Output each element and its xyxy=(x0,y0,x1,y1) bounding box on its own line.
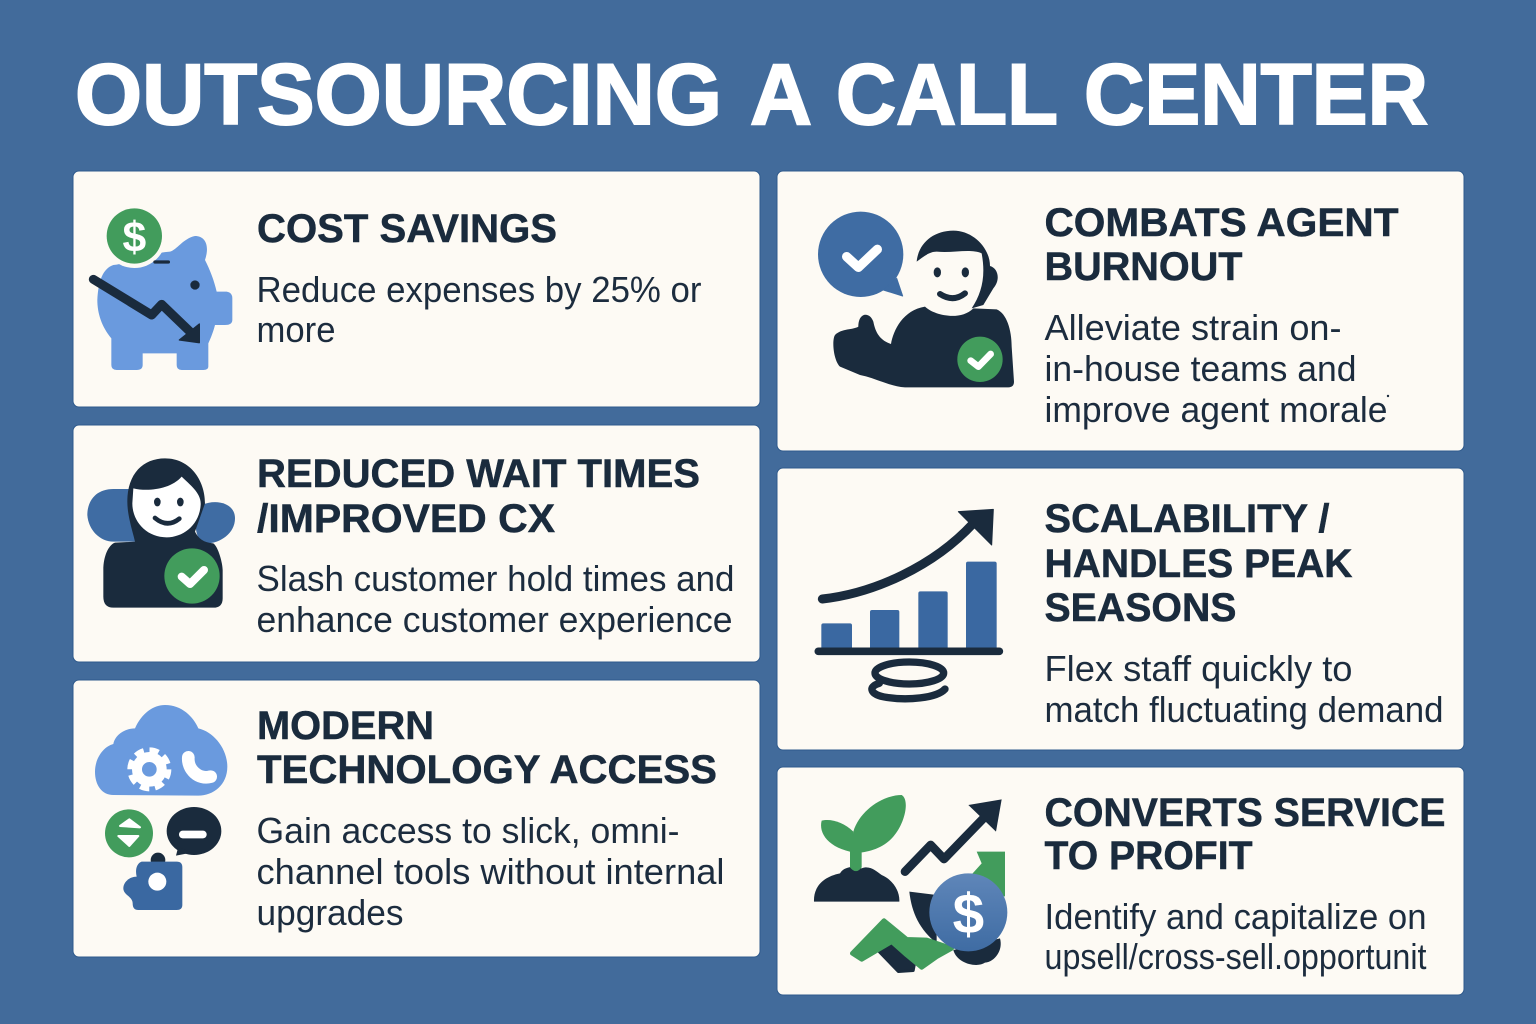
panel: converts service to profit xyxy=(777,767,1464,995)
body text: Gain access to slick, omni- xyxy=(256,810,680,851)
icon: piggy bank with coin and falling arrow xyxy=(93,204,232,370)
body text: Slash customer hold times and xyxy=(256,558,734,599)
body text: upsell/cross-sell.opportunit xyxy=(1044,936,1426,977)
icon: piggy bank with coin and falling arrow: $ xyxy=(122,213,146,261)
title xyxy=(75,47,1428,143)
body text: Identify and capitalize on xyxy=(1044,896,1426,937)
heading xyxy=(257,452,700,541)
icon: sprout, rising arrow, handshake and dollar coin: $ xyxy=(953,883,984,946)
body text xyxy=(1044,896,1426,977)
body text xyxy=(256,810,724,933)
panel: reduced wait times xyxy=(73,425,760,662)
title: CENTER xyxy=(1084,47,1428,143)
heading: REDUCED WAIT TIMES xyxy=(257,452,700,496)
title: A xyxy=(750,47,812,143)
heading: TECHNOLOGY ACCESS xyxy=(257,748,717,792)
body text: improve agent morale xyxy=(1044,389,1388,430)
heading: TO PROFIT xyxy=(1044,834,1252,878)
body text: channel tools without internal xyxy=(256,851,724,892)
icon: cloud with gear, phone, chat and puzzle piece xyxy=(95,705,227,910)
icon: growing bars on spring with rising arrow xyxy=(818,509,999,699)
heading: CONVERTS SERVICE xyxy=(1044,791,1446,835)
heading: COST SAVINGS xyxy=(257,207,557,251)
panel: modern technology access xyxy=(73,680,760,957)
title: OUTSOURCING xyxy=(75,47,722,143)
body text: Flex staff quickly to xyxy=(1044,648,1352,689)
body text xyxy=(256,269,702,350)
heading: /IMPROVED CX xyxy=(257,497,555,541)
heading xyxy=(257,704,717,792)
panel: cost savings xyxy=(73,171,760,407)
body text: Reduce expenses by 25% or xyxy=(256,269,702,310)
body text: in-house teams and xyxy=(1044,348,1356,389)
heading xyxy=(1044,497,1353,630)
heading xyxy=(1044,201,1398,289)
body text xyxy=(1044,307,1389,430)
panel: combats agent burnout xyxy=(777,171,1464,451)
body text: more xyxy=(256,309,336,350)
heading: MODERN xyxy=(257,704,434,748)
heading: COMBATS AGENT xyxy=(1044,201,1398,245)
heading: SEASONS xyxy=(1044,586,1236,630)
body text: upgrades xyxy=(256,892,404,933)
icon: sprout, rising arrow, handshake and dollar coin xyxy=(814,795,1007,972)
heading: SCALABILITY / xyxy=(1044,497,1330,541)
body text xyxy=(1044,648,1444,730)
body text: match fluctuating demand xyxy=(1044,689,1444,730)
title: CALL xyxy=(836,47,1058,143)
body text: Alleviate strain on- xyxy=(1044,307,1342,348)
heading: HANDLES PEAK xyxy=(1044,542,1353,586)
panel: scalability xyxy=(777,468,1464,750)
heading: BURNOUT xyxy=(1044,245,1242,289)
body text: enhance customer experience xyxy=(256,599,732,640)
body text xyxy=(256,558,734,640)
heading xyxy=(1044,791,1446,878)
icon: smiling customer with check badge xyxy=(87,458,235,608)
icon: agent giving thumbs up with speech bubble xyxy=(818,212,1014,387)
